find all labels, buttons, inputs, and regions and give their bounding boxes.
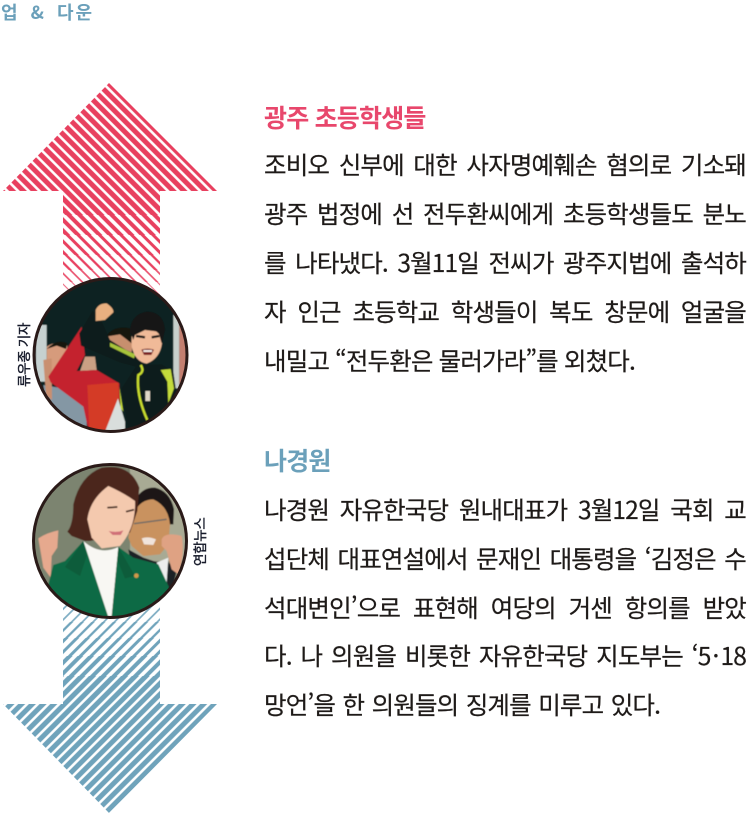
heading: Gwangju schoolchildren: 광주 초등학생들 — [264, 99, 426, 135]
photo: schoolchildren at window — [30, 275, 190, 435]
photo credit: news agency: 연합뉴스 — [189, 518, 209, 566]
text block: Gwangju schoolchildren: 조비오 신부에 대한 사자명예훼손 혐의로 기소돼 — [264, 147, 746, 182]
text block: Na Kyung-won: 나경원 자유한국당 원내대표가 3월12일 국회 교 — [264, 492, 746, 527]
text block: Na Kyung-won: 섭단체 대표연설에서 문재인 대통령을 ‘김정은 수 — [264, 541, 746, 576]
arrow: striped blue down arrow — [0, 595, 220, 816]
heading: Na Kyung-won: 나경원 — [264, 442, 331, 478]
photo credit: reporter: 류우종 기자 — [13, 322, 33, 387]
text block: Na Kyung-won: 망언’을 한 의원들의 징계를 미루고 있다. — [264, 687, 660, 722]
text block: Gwangju schoolchildren — [264, 147, 746, 378]
text block: Na Kyung-won — [264, 492, 746, 722]
text block: Na Kyung-won: 석대변인’으로 표현해 여당의 거센 항의를 받았 — [264, 590, 746, 625]
text block: Gwangju schoolchildren: 를 나타냈다. 3월11일 전씨가 광주지법에 출석하 — [264, 245, 746, 280]
photo: Na Kyung-won — [30, 461, 190, 621]
text block: Gwangju schoolchildren: 내밀고 “전두환은 물러가라”를 외쳤다. — [264, 343, 635, 378]
text block: Na Kyung-won: 다. 나 의원을 비롯한 자유한국당 지도부는 ‘5·18 — [264, 638, 746, 673]
text block: Gwangju schoolchildren: 광주 법정에 선 전두환씨에게 초등학생들도 분노 — [264, 196, 746, 231]
arrow: striped red up arrow — [0, 80, 220, 300]
text block: Gwangju schoolchildren: 자 인근 초등학교 학생들이 복도 창문에 얼굴을 — [264, 294, 746, 329]
